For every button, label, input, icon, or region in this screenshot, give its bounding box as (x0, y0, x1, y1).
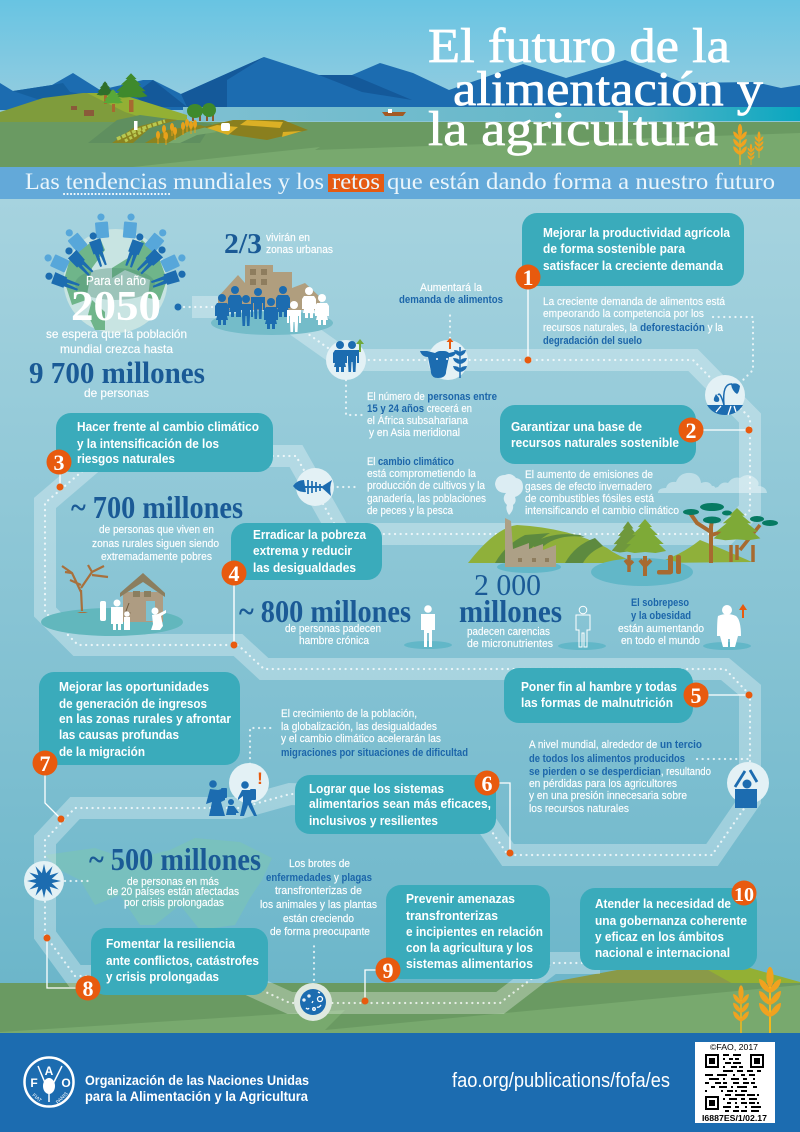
icon: outlined person (558, 606, 606, 650)
header landscape illustration (0, 0, 800, 168)
text: youth: y en Asia meridional (369, 427, 460, 439)
panel: trend 3 box: y la intensificación de los (77, 436, 219, 451)
panel: trend 6 box (295, 775, 496, 834)
bottom landscape (0, 968, 800, 1033)
icon: FAO logo: FIAT (31, 1093, 43, 1104)
journey path dots (45, 307, 750, 1003)
icon: fish skeleton (293, 468, 334, 506)
panel: trend 3 box: riesgos naturales (77, 451, 175, 466)
text: youth: El número de personas entre (367, 391, 497, 403)
icon: warning mark: ! (257, 769, 263, 788)
text: pests: enfermedades y plagas (266, 872, 372, 884)
text: food loss: A nivel mundial, alrededor de un tercio (529, 739, 702, 751)
title: la agricultura (428, 101, 718, 156)
panel: trend 1 box (522, 213, 744, 286)
numbered badges and connectors: 1 (522, 265, 534, 290)
icon: FAO logo (24, 1058, 74, 1106)
panel: trend 10 box: nacional e internacional (595, 945, 730, 960)
text: demand callout: Aumentará la (420, 282, 483, 294)
subtitle band (0, 167, 800, 199)
text: food loss: y en una presión innecesaria sobre (529, 790, 687, 802)
title: alimentación y (453, 61, 764, 116)
organization name: Organización de las Naciones Unidas (85, 1072, 309, 1088)
text: 2050 population: 2050 (71, 284, 161, 330)
text: demand pressure: recursos naturales, la deforestación y la (543, 322, 724, 334)
callout dotted connectors (65, 312, 753, 980)
text: demand callout (399, 282, 503, 306)
numbered badges and connectors: 6 (482, 771, 492, 796)
panel: trend 7 box: en las zonas rurales y afrontar (59, 711, 231, 726)
panel: trend 7 box: Mejorar las oportunidades (59, 679, 209, 694)
panel: trend 4 box (231, 523, 382, 580)
panel: trend 2 box: recursos naturales sostenible (511, 435, 679, 450)
text: overweight: El sobrepeso (631, 597, 689, 609)
numbered badges and connectors: 8 (82, 976, 94, 1001)
text: pests (260, 858, 377, 938)
text: pests: de forma preocupante (270, 926, 370, 938)
panel: trend 9 box: Prevenir amenazas (406, 891, 515, 906)
text: 2000 million: de micronutrientes (467, 638, 553, 650)
text: 500 million: por crisis prolongadas (124, 897, 224, 909)
text: 800 million (239, 593, 411, 647)
panel: trend 9 box: sistemas alimentarios (406, 956, 533, 971)
numbered badges and connectors: 10 (734, 884, 754, 906)
panel: trend 4 box: las desigualdades (253, 560, 356, 575)
text: food loss (529, 739, 711, 815)
text: pests: Los brotes de (289, 858, 350, 870)
panel: trend 8 box: Fomentar la resiliencia (106, 936, 236, 951)
text: 700 million: extremadamente pobres (101, 551, 212, 563)
left hill (0, 93, 187, 122)
text: emissions: de combustibles fósiles está (525, 493, 655, 505)
panel: trend 4 box: Erradicar la pobreza (253, 527, 367, 542)
text: 2/3 urban: zonas urbanas (266, 244, 333, 256)
illustration: clouds (658, 473, 767, 493)
text: youth: 15 y 24 años crecerá en (367, 403, 472, 415)
icon: FAO logo: PANIS (55, 1091, 70, 1106)
panel: trend 4 box: extrema y reducir (253, 543, 352, 558)
panel: trend 6 box: Lograr que los sistemas (309, 781, 444, 796)
icon: food waste bin (727, 762, 769, 808)
text: food loss: se pierden o se desperdician, resultando (529, 766, 711, 778)
panel: trend 7 box: de la migración (59, 744, 145, 759)
text: migration: la globalización, las desigualdades (281, 721, 437, 733)
website url: fao.org/publications/fofa/es (452, 1070, 670, 1092)
title (428, 18, 764, 156)
text: climate change: de peces y la pesca (367, 505, 454, 517)
numbered badges and connectors (32, 264, 756, 1004)
marker: start dot (174, 304, 182, 310)
illustration: hills with factory (468, 518, 752, 573)
text: migration (281, 708, 468, 759)
icon: FAO logo: F (30, 1076, 38, 1090)
text: demand callout: demanda de alimentos (399, 294, 503, 306)
panel: trend 10 box: una gobernanza coherente (595, 913, 747, 928)
text: 500 million: de 20 países están afectadas (107, 886, 239, 898)
numbered badges and connectors: 4 (228, 561, 240, 586)
text: youth: el África subsahariana (367, 414, 469, 427)
trees on hill (97, 73, 216, 121)
text: 2/3 urban (224, 228, 333, 260)
text: overweight: y la obesidad (631, 610, 691, 622)
text: emissions: El aumento de emisiones de (525, 469, 653, 481)
panel: trend 7 box: de generación de ingresos (59, 696, 207, 711)
text: climate change: producción de cultivos y la (367, 480, 486, 492)
panel: trend 9 box: con la agricultura y los (406, 940, 533, 955)
text: climate change: ganadería, las poblaciones (367, 493, 486, 505)
text: 700 million (71, 489, 243, 563)
text: 2050 population: de personas (84, 386, 149, 400)
text: demand pressure: degradación del suelo (543, 335, 642, 347)
icon: header wheat (733, 124, 763, 165)
icon: plant on cracked soil (705, 375, 745, 415)
panel: trend 1 box: de forma sostenible para (543, 241, 686, 256)
panel: trend 8 box: y crisis prolongadas (106, 969, 219, 984)
numbered badges and connectors: 3 (54, 450, 64, 475)
icon: pathogens (294, 983, 332, 1021)
text: 2/3 urban: vivirán en (266, 232, 310, 244)
text: emissions (525, 469, 679, 517)
panel: trend 9 box: e incipientes en relación (406, 924, 543, 939)
text: migration: y el cambio climático acelerarán las (281, 733, 441, 745)
panel: trend 3 box: Hacer frente al cambio climático (77, 419, 259, 434)
fishing boat (382, 109, 406, 116)
icon: globe with people (42, 213, 188, 333)
QR code block: I6887ES/1/02.17 (702, 1114, 768, 1123)
text: 700 million: de personas que viven en (99, 524, 214, 536)
text: overweight: están aumentando (618, 623, 704, 635)
QR code block: ©FAO, 2017 (710, 1043, 759, 1052)
text: 2050 population (29, 274, 205, 400)
panel: trend 2 box (500, 405, 696, 464)
panel: trend 7 box (39, 672, 240, 765)
panel: trend 6 box: inclusivos y resilientes (309, 813, 438, 828)
organization name: para la Alimentación y la Agricultura (85, 1088, 308, 1104)
subtitle text: retos (332, 169, 380, 194)
text: demand pressure: La creciente demanda de alimentos está (543, 296, 726, 308)
panel: trend 7 box: las causas profundas (59, 727, 179, 742)
text: 2050 population: Para el año (86, 274, 146, 288)
panel: trend 1 box: Mejorar la productividad agrícola (543, 225, 731, 240)
text: 500 million: de personas en más (127, 876, 219, 888)
title: El futuro de la (428, 18, 730, 73)
icon: young couple (326, 339, 366, 380)
panel: trend 2 box: Garantizar una base de (511, 419, 642, 434)
icon: FAO logo: A (45, 1064, 54, 1078)
world map background (45, 838, 272, 930)
text: migration: migraciones por situaciones de dificultad (281, 747, 468, 759)
text: 2050 population: mundial crezca hasta (60, 342, 173, 356)
text: demand pressure: empeorando la competencia por los (543, 308, 704, 320)
numbered badges and connectors: 2 (686, 418, 696, 443)
numbered badges and connectors: 5 (690, 683, 702, 708)
text: youth (367, 391, 497, 439)
page background (0, 198, 800, 988)
panel: trend 6 box: alimentarios sean más eficaces, (309, 796, 491, 811)
panel: trend 10 box (580, 888, 757, 970)
text: 700 million: zonas rurales siguen siendo (92, 538, 219, 550)
text: 700 million: ~ 700 millones (71, 489, 243, 525)
text: 2000 million: 2 000 (474, 567, 541, 602)
icon: FAO logo: O (61, 1076, 71, 1090)
illustration: trees and logs (591, 503, 778, 586)
subtitle text: que están dando forma a nuestro futuro (387, 169, 775, 194)
tractor and farmer (134, 121, 230, 131)
subtitle text: Las tendencias mundiales y los (25, 169, 324, 194)
text: pests: transfronterizas de (275, 885, 362, 897)
text: 500 million (89, 841, 261, 909)
panel: trend 5 box (504, 668, 693, 723)
text: pests: los animales y las plantas (260, 899, 377, 911)
organization name (85, 1072, 309, 1104)
text: overweight (618, 597, 704, 647)
text: 2050 population: se espera que la población (46, 327, 187, 341)
panel: trend 8 box (91, 928, 268, 995)
text: food loss: en pérdidas para los agricultores (529, 778, 677, 790)
text: 2/3 urban: 2/3 (224, 228, 262, 260)
icon: crisis burst (24, 861, 64, 901)
icon: thin person (404, 605, 452, 649)
panel: trend 5 box: las formas de malnutrición (521, 695, 673, 710)
text: food loss: de todos los alimentos producidos (529, 753, 685, 765)
text: 2050 population: 9 700 millones (29, 355, 205, 390)
illustration: city with people (211, 265, 333, 335)
icon: bottom wheat (733, 967, 781, 1033)
panel: trend 10 box: y eficaz en los ámbitos (595, 929, 724, 944)
text: emissions: gases de efecto invernadero (525, 481, 652, 493)
icon: cow and wheat (420, 338, 468, 380)
numbered badges and connectors: 9 (382, 958, 394, 983)
panel: trend 1 box: satisfacer la creciente demanda (543, 258, 724, 273)
panel: trend 3 box (56, 413, 273, 472)
journey path band (45, 307, 750, 1003)
footer (0, 1033, 800, 1132)
icon: obese person (703, 604, 751, 650)
text: 2000 million (459, 567, 562, 650)
text: pests: están creciendo (283, 913, 354, 925)
panel: trend 9 box: transfronterizas (406, 908, 498, 923)
numbered badges and connectors: 7 (40, 751, 50, 776)
QR code block (695, 1042, 775, 1123)
illustration: rural poverty scene (41, 565, 183, 636)
text: overweight: en todo el mundo (621, 635, 700, 647)
panel: trend 10 box: Atender la necesidad de (595, 896, 731, 911)
text: migration: El crecimiento de la población, (281, 708, 417, 720)
text: 800 million: hambre crónica (299, 635, 370, 647)
panel: trend 5 box: Poner fin al hambre y todas (521, 679, 677, 694)
text: climate change (367, 456, 486, 517)
mountains (0, 57, 800, 110)
text: climate change: El cambio climático (367, 456, 454, 468)
text: 2000 million: padecen carencias (467, 626, 550, 638)
subtitle text (25, 169, 775, 194)
text: food loss: los recursos naturales (529, 803, 629, 815)
panel: trend 9 box (386, 885, 550, 979)
text: 2000 million: millones (459, 593, 562, 629)
illustration: smoke (495, 474, 523, 515)
text: climate change: está comprometiendo la (367, 468, 477, 480)
text: demand pressure (543, 296, 726, 347)
panel: trend 8 box: ante conflictos, catástrofes (106, 953, 259, 968)
text: 800 million: de personas padecen (285, 623, 381, 635)
text: 500 million: ~ 500 millones (89, 841, 261, 877)
text: 800 million: ~ 800 millones (239, 593, 411, 629)
icon: migrants (206, 763, 269, 816)
cows (71, 106, 94, 116)
farm fields (88, 115, 308, 145)
text: emissions: intensificando el cambio climático (525, 505, 679, 517)
